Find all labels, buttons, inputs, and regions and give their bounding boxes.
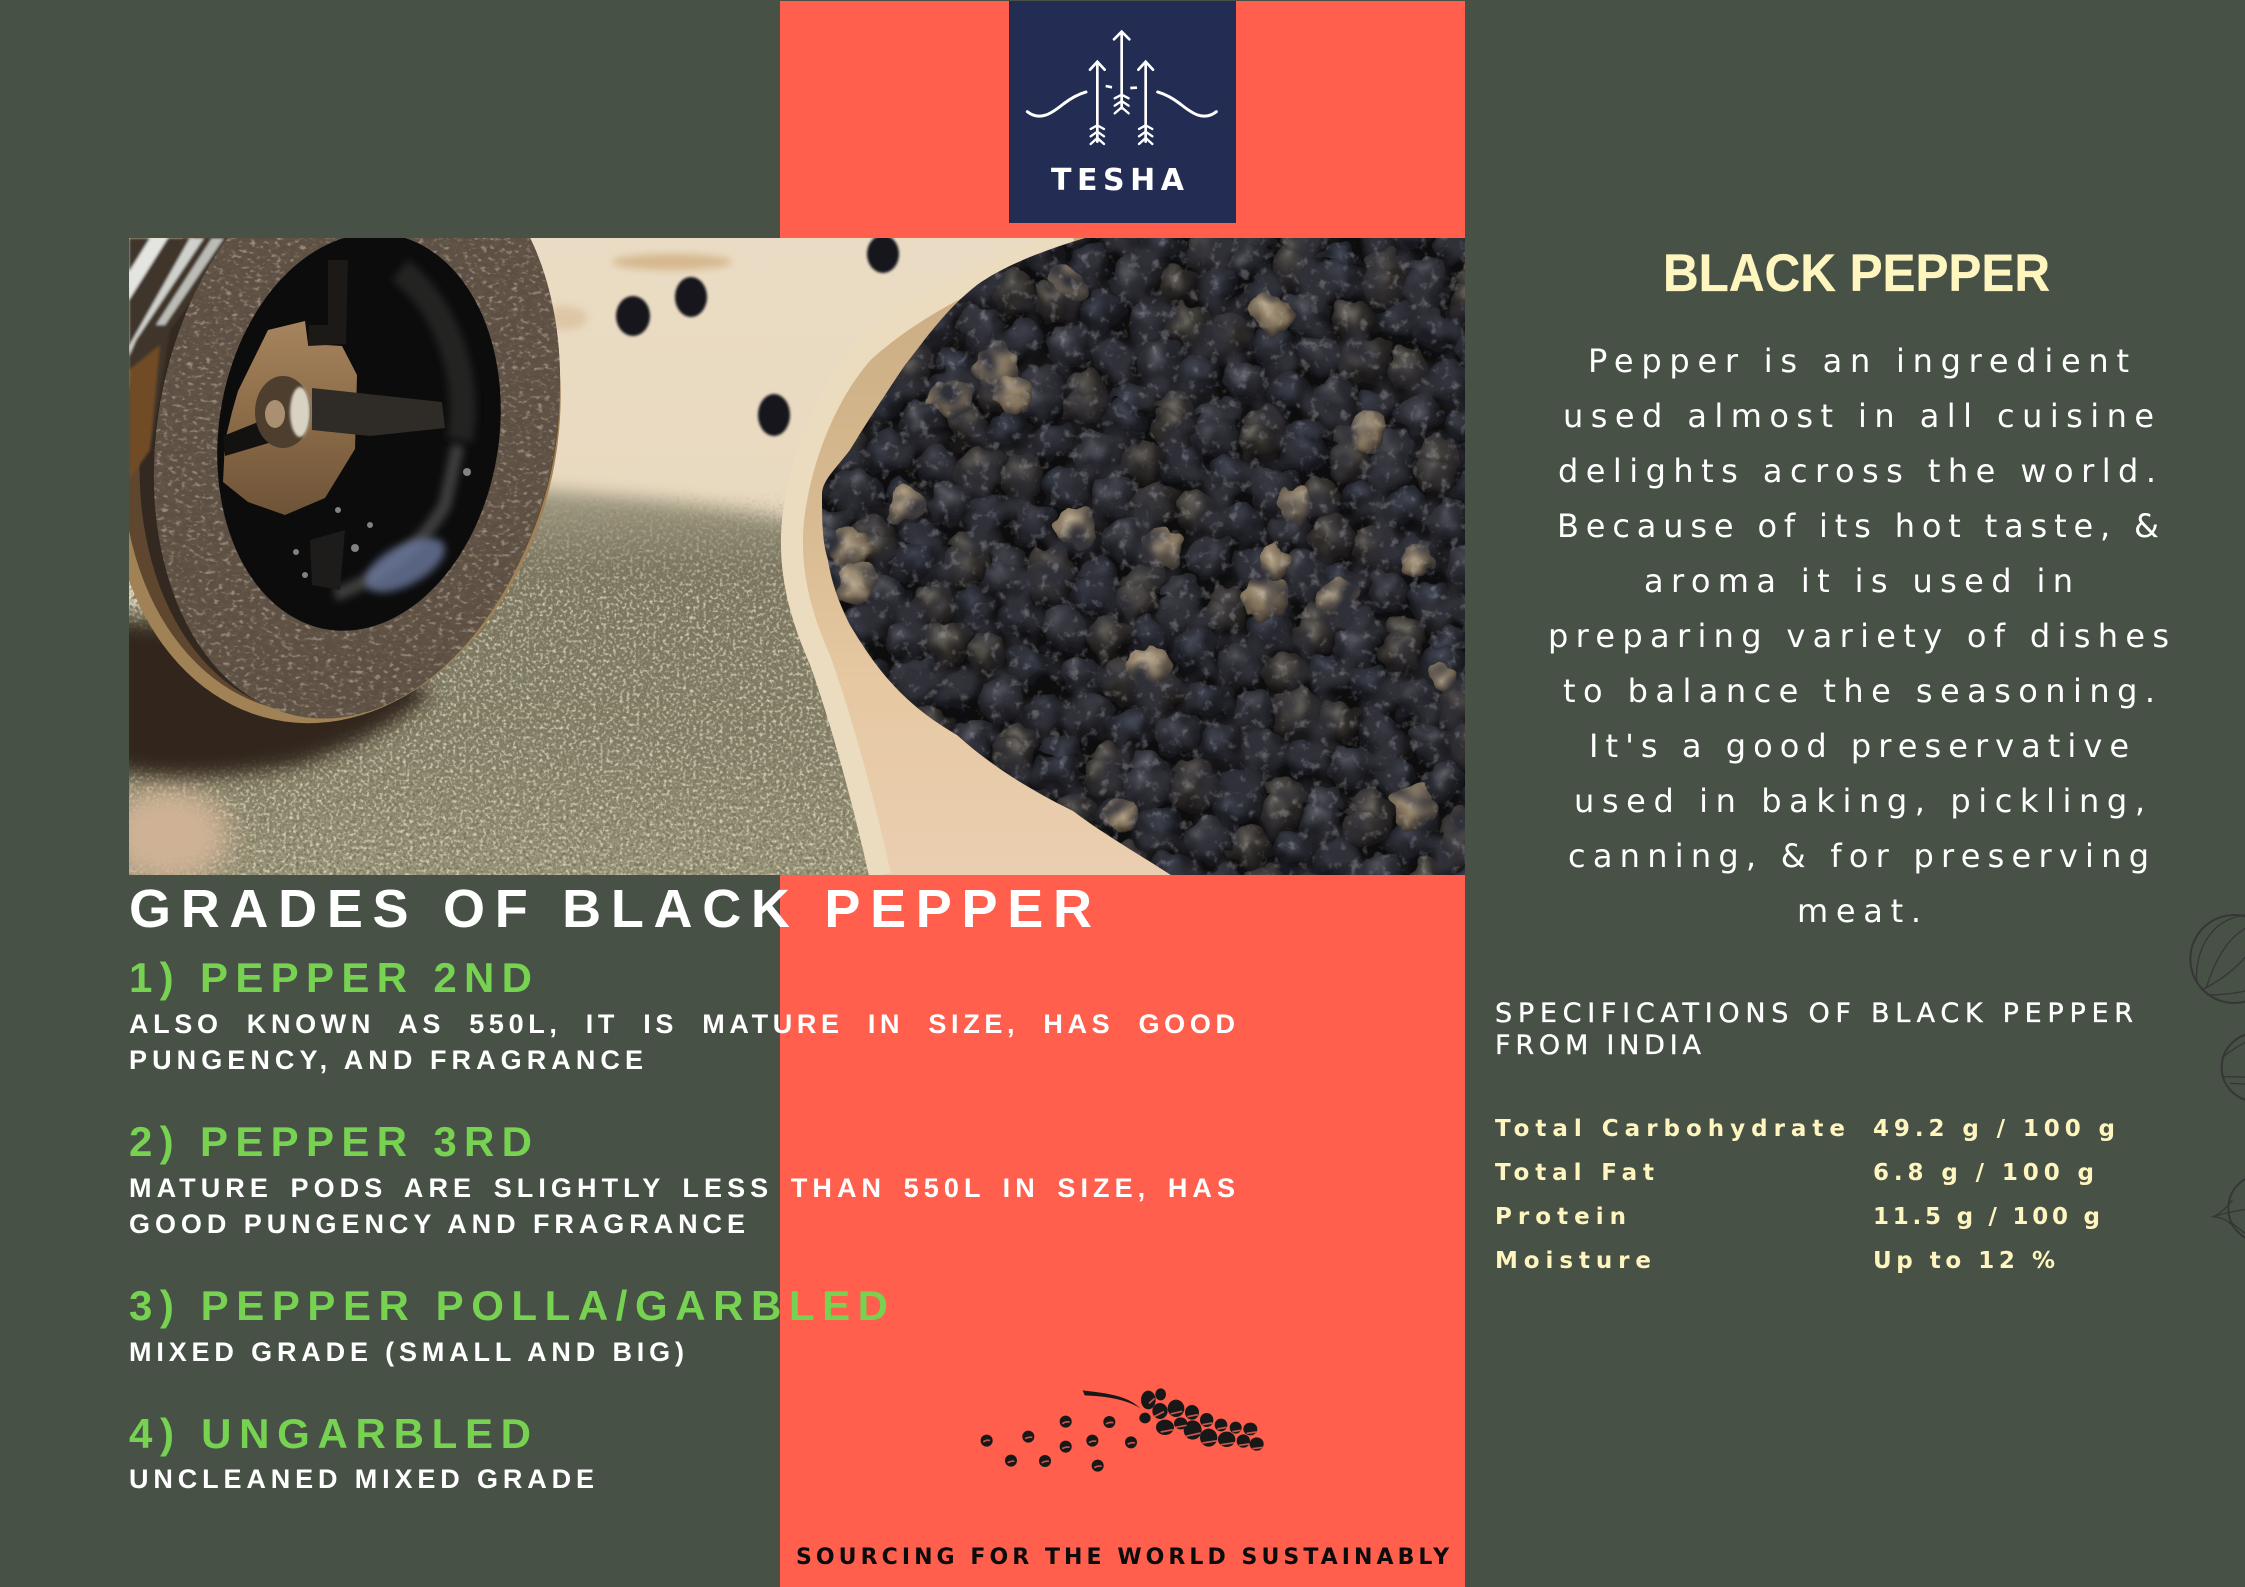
grade 3: MIXED GRADE (SMALL AND BIG): [129, 1337, 684, 1367]
heading: specifications: [1495, 998, 2133, 1061]
description paragraph: preparing variety of dishes: [1548, 617, 2169, 655]
description paragraph: [1548, 342, 2169, 930]
row: protein: Protein: [1495, 1204, 1626, 1230]
heading: specifications: FROM INDIA: [1495, 1030, 1702, 1061]
grade 1: PUNGENCY, AND FRAGRANCE: [129, 1045, 643, 1075]
specifications table: [1495, 1116, 2115, 1274]
pepper grinder: [129, 238, 561, 724]
heading: black pepper: BLACK PEPPER: [1663, 244, 2050, 303]
description paragraph: aroma it is used in: [1644, 562, 2073, 600]
description paragraph: used almost in all cuisine: [1563, 397, 2154, 435]
grade 4: 4) UNGARBLED: [129, 1410, 531, 1457]
row: moisture: [1495, 1248, 2055, 1274]
grade 2: 2) PEPPER 3RD: [129, 1118, 532, 1165]
table and ground pepper: [129, 238, 1042, 875]
row: carbohydrate: 49.2 g / 100 g: [1873, 1116, 2115, 1142]
heading: grades of black pepper: GRADES OF BLACK PEPPER: [129, 879, 1092, 939]
row: fat: 6.8 g / 100 g: [1873, 1160, 2094, 1186]
grinder metal rim: [129, 238, 226, 478]
wooden bowl: [792, 238, 1200, 875]
grade 2: MATURE PODS ARE SLIGHTLY LESS THAN 550L IN SIZE, HAS: [129, 1173, 1235, 1203]
icon: seed outlines: [2190, 915, 2245, 1242]
peppercorns in bowl: [822, 238, 1465, 875]
grade 3: 3) PEPPER POLLA/GARBLED: [129, 1282, 888, 1329]
grade 1: [129, 954, 1235, 1075]
heading: specifications: SPECIFICATIONS OF BLACK PEPPER: [1495, 998, 2133, 1029]
row: protein: [1495, 1204, 2100, 1230]
grade 4: UNCLEANED MIXED GRADE: [129, 1464, 594, 1494]
description paragraph: meat.: [1797, 892, 1921, 930]
row: moisture: Moisture: [1495, 1248, 1651, 1274]
row: fat: [1495, 1160, 2094, 1186]
grade 1: 1) PEPPER 2ND: [129, 954, 532, 1001]
grade 3: [129, 1282, 888, 1367]
row: carbohydrate: [1495, 1116, 2115, 1142]
logo: Tesha: TESHA: [1051, 163, 1185, 198]
panel: orange column: [780, 1, 1465, 1587]
row: carbohydrate: Total Carbohydrate: [1495, 1116, 1845, 1142]
row: fat: Total Fat: [1495, 1160, 1654, 1186]
description paragraph: used in baking, pickling,: [1574, 782, 2145, 820]
description paragraph: Because of its hot taste, &: [1557, 507, 2159, 545]
row: moisture: Up to 12 %: [1873, 1248, 2055, 1274]
tagline: SOURCING FOR THE WORLD SUSTAINABLY: [796, 1545, 1450, 1570]
icon: pepper sprig: [981, 1388, 1264, 1472]
photo: pepper grinder and bowl of peppercorns: [129, 238, 1465, 875]
description paragraph: to balance the seasoning.: [1563, 672, 2155, 710]
logo: Tesha: [1009, 1, 1236, 223]
grade 4: [129, 1410, 594, 1494]
description paragraph: Pepper is an ingredient: [1588, 342, 2129, 380]
grade 2: [129, 1118, 1235, 1239]
grade 1: ALSO KNOWN AS 550L, IT IS MATURE IN SIZE, HAS GOOD: [129, 1009, 1235, 1039]
description paragraph: It's a good preservative: [1589, 727, 2129, 765]
loose peppercorns: [616, 235, 899, 436]
description paragraph: delights across the world.: [1558, 452, 2156, 490]
description paragraph: canning, & for preserving: [1568, 837, 2149, 875]
grinder opening: [217, 238, 501, 631]
grade 2: GOOD PUNGENCY AND FRAGRANCE: [129, 1209, 745, 1239]
row: protein: 11.5 g / 100 g: [1873, 1204, 2100, 1230]
